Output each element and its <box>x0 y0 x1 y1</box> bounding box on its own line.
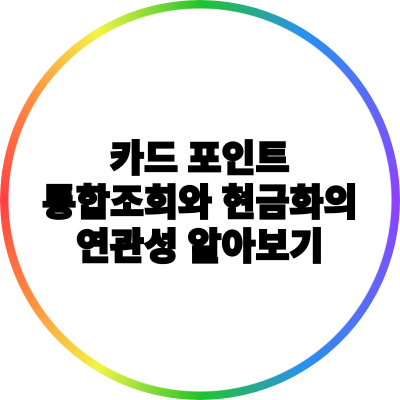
title line 3: 연관성 알아보기 <box>76 226 324 267</box>
title line 1: 카드 포인트 <box>110 138 290 179</box>
title <box>42 138 358 267</box>
title line 2: 통합조회와 현금화의 <box>42 182 358 223</box>
